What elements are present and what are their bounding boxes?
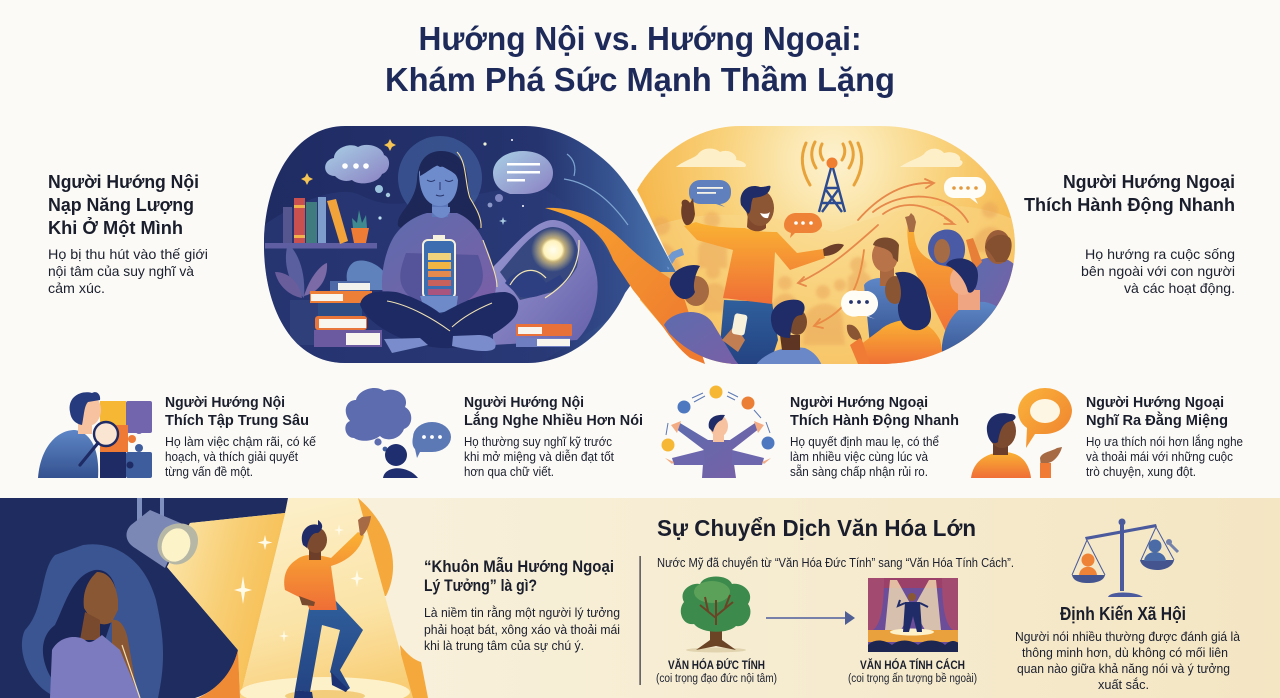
text [464,394,643,479]
text block: introvert intro: Khi Ở Một Mình [48,217,183,238]
icon: talker with bubble [971,388,1072,478]
figure: smiling man right [864,238,901,338]
card: listening [345,388,643,479]
text block: extrovert ideal: “Khuôn Mẫu Hướng Ngoại [424,557,614,576]
plant [275,244,327,345]
text: Lắng Nghe Nhiều Hơn Nói [464,411,643,429]
figure: woman raising arm [905,213,985,340]
figure: woman with navy hair [847,272,945,366]
text block: extrovert intro: Họ hướng ra cuộc sống [1085,246,1235,262]
bottom band [0,498,1280,698]
text block: introvert intro [48,172,208,296]
text block: introvert intro: nội tâm của suy nghĩ và [48,263,194,279]
sparkles [234,524,364,642]
text: hơn qua chữ viết. [464,465,554,479]
halo [398,136,482,204]
figure: thoughtful woman [22,544,163,698]
title [385,20,895,98]
text block: introvert intro: cảm xúc. [48,280,105,296]
labels: cultures: (coi trọng đạo đức nội tâm) [656,673,777,685]
book stack right [516,324,572,347]
text block: extrovert ideal: Là niềm tin rằng một người lý tưởng [424,605,620,620]
icon: thought cloud [325,145,390,197]
figure: man in blue front [942,258,996,352]
text block: extrovert intro: Thích Hành Động Nhanh [1024,195,1235,215]
text: trò chuyện, xung đột. [1086,465,1196,479]
figure: meditating woman [382,151,497,305]
clouds [676,148,963,167]
orange swoosh [545,208,705,364]
icon: speech bubble [488,151,553,207]
book stacks left [310,260,390,347]
text block: extrovert ideal [424,557,620,653]
text: từng vấn đề một. [165,465,253,479]
panel: extrovert scene figures [664,177,1015,366]
text block: extrovert ideal: khi là trung tâm của sự chú ý. [424,638,584,653]
text block: introvert intro: Người Hướng Nội [48,172,199,192]
text: Nghĩ Ra Đằng Miệng [1086,411,1228,429]
text block: social bias: thông minh hơn, dù không có mối liên [1022,645,1228,660]
text block: social bias: xuất sắc. [1098,677,1149,692]
labels: cultures: VĂN HÓA TÍNH CÁCH [860,659,965,672]
heading: cultural shift: Sự Chuyển Dịch Văn Hóa Lớn [657,515,976,541]
arrows of energy [798,179,968,328]
labels: cultures: VĂN HÓA ĐỨC TÍNH [668,659,765,672]
text: khi mở miệng và diễn đạt tốt [464,449,614,464]
speech bubble white with dots [841,290,878,319]
arrow [766,611,855,625]
icon: puzzle and magnifier [38,392,152,478]
text: làm nhiều việc cùng lúc và [790,450,928,464]
card: quick action [662,386,959,479]
text: Họ ưa thích nói hơn lắng nghe [1086,434,1243,449]
speech bubbles [689,177,986,238]
title: Hướng Nội vs. Hướng Ngoại: [418,20,862,57]
text: Họ quyết định mau lẹ, có thể [790,435,939,449]
figure: listener lower left with phone [664,248,748,366]
text block: social bias [1015,604,1241,692]
panel: introvert scene [264,126,684,364]
text block: extrovert ideal: Lý Tưởng” là gì? [424,577,537,595]
figure: listener bottom center [755,300,822,366]
icon: tree [681,576,750,652]
text block: introvert intro: Họ bị thu hút vào thế giới [48,246,208,262]
text: Người Hướng Nội [464,394,584,411]
background crowd [645,202,1007,345]
labels: cultures [656,659,977,685]
panel: extrovert scene background [630,126,1020,366]
icon: stage scene [868,578,958,652]
divider [640,556,641,685]
text block: introvert intro: Nạp Năng Lượng [48,195,194,215]
legs and hands [360,291,518,353]
labels: cultures: (coi trọng ấn tượng bề ngoài) [848,673,977,685]
figure: man far right [966,230,1015,320]
text: Thích Hành Động Nhanh [790,412,959,429]
text: Người Hướng Nội [165,394,285,411]
text [165,394,316,479]
card: think out loud [971,388,1243,479]
icon: broadcast tower [802,142,862,212]
icon: battery [423,235,455,298]
icon: spotlight lamp [126,498,198,568]
text block: social bias: Người nói nhiều thường được đánh giá là [1015,629,1241,644]
text: Người Hướng Ngoại [790,394,928,411]
text block: extrovert intro: bên ngoài với con người [1081,263,1235,279]
text [1086,394,1243,479]
text [790,394,959,479]
text: Họ thường suy nghĩ kỹ trước [464,435,612,449]
text: cultural shift intro: Nước Mỹ đã chuyển từ “Văn Hóa Đức Tính” sang “Văn Hóa Tính Cách”. [657,556,1014,570]
card: deep focus [38,392,316,479]
text: Họ làm việc chậm rãi, có kế [165,435,316,449]
text block: extrovert ideal: phải hoạt bát, xông xáo và thoải mái [424,622,620,637]
text: Thích Tập Trung Sâu [165,412,309,429]
figure: main speaker [681,186,844,364]
text block: social bias: quan nào giữa khả năng nói và ý tưởng [1017,661,1230,676]
text: và thoải mái với những cuộc [1086,450,1233,464]
icon: juggler [662,386,774,478]
shelf with books [265,197,377,248]
text block: extrovert intro: và các hoạt động. [1124,280,1235,296]
text block: extrovert intro: Người Hướng Ngoại [1063,172,1235,192]
text: hoạch, và thích giải quyết [165,450,298,464]
figure: dancing man [284,516,371,698]
icon: thinking head with cloud [345,388,451,478]
illustration: spotlight scene [0,498,428,698]
text: sẵn sàng chấp nhận rủi ro. [790,464,928,479]
text block: extrovert intro [1024,172,1235,296]
text block: social bias: Định Kiến Xã Hội [1060,604,1186,624]
decorative stars [301,139,524,225]
title: Khám Phá Sức Mạnh Thầm Lặng [385,61,895,98]
text: Người Hướng Ngoại [1086,394,1224,411]
icon: scales of bias [1072,518,1178,597]
beanbag with moon [493,220,598,345]
